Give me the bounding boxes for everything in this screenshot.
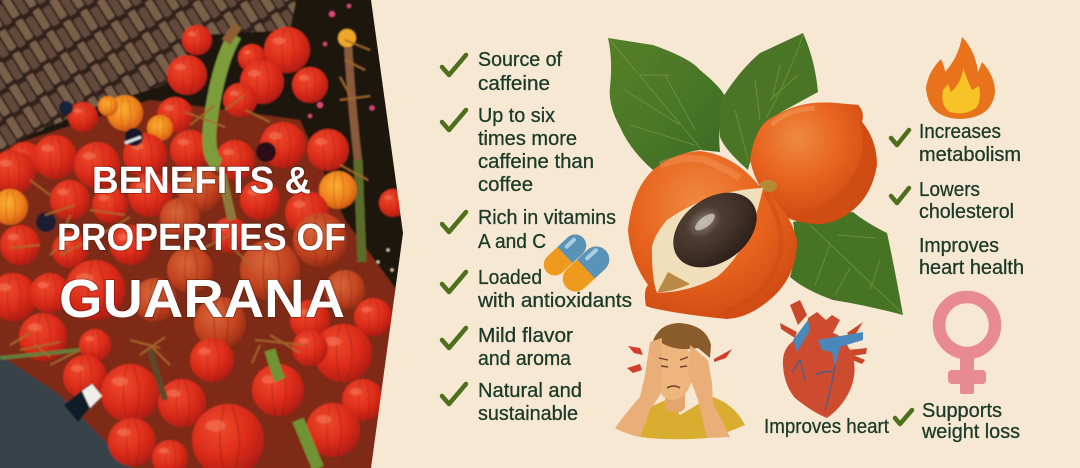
title line: benefits: BENEFITS & xyxy=(92,160,311,202)
hair xyxy=(652,323,711,358)
icon: anatomical heart xyxy=(780,300,867,418)
icon: female symbol xyxy=(939,297,995,394)
item: natural xyxy=(442,380,582,425)
item: natural: Natural and xyxy=(478,380,582,402)
item: six times more caffeine: caffeine than xyxy=(478,151,594,173)
seed xyxy=(659,177,771,283)
caption: improves heart: Improves heart xyxy=(764,416,889,438)
leaf: lower right xyxy=(790,212,903,315)
item: vitamins: A and C xyxy=(478,231,546,253)
item: metabolism xyxy=(891,121,1021,166)
item: natural: sustainable xyxy=(478,403,578,425)
item: six times more caffeine: coffee xyxy=(478,174,533,196)
item: metabolism: Increases xyxy=(919,121,1001,143)
item: weight loss: Supports xyxy=(922,400,1002,422)
berries back xyxy=(0,25,407,468)
item: vitamins xyxy=(442,207,616,253)
item: mild flavor: Mild flavor xyxy=(478,325,573,347)
item: mild flavor xyxy=(442,325,573,370)
item: metabolism: metabolism xyxy=(919,144,1021,166)
item: source of caffeine xyxy=(442,49,562,95)
fruit stem joint xyxy=(759,180,777,192)
icon: man with headache xyxy=(615,323,745,439)
item: cholesterol: cholesterol xyxy=(919,201,1014,223)
item: mild flavor: and aroma xyxy=(478,348,572,370)
stem right xyxy=(348,45,358,160)
item: heart health: heart health xyxy=(919,257,1024,279)
title xyxy=(57,160,346,329)
item: heart health xyxy=(919,235,1024,279)
stems and flower twigs xyxy=(0,25,370,468)
item: antioxidants xyxy=(442,267,632,312)
pith xyxy=(652,188,763,293)
guarana leaves xyxy=(608,33,903,315)
item: antioxidants: with antioxidants xyxy=(477,290,632,312)
item: vitamins: Rich in vitamins xyxy=(478,207,616,229)
item: six times more caffeine: Up to six xyxy=(478,105,555,127)
item: weight loss: weight loss xyxy=(921,421,1020,443)
item: source of caffeine: caffeine xyxy=(478,73,550,95)
icon: vitamin pills xyxy=(539,230,615,297)
benefits list left xyxy=(442,49,632,425)
leaf: upper right xyxy=(719,33,818,170)
photo panel: guarana berries xyxy=(0,0,408,468)
title line: properties of: PROPERTIES OF xyxy=(57,217,346,259)
guarana fruit: open with seed xyxy=(628,151,797,319)
item: six times more caffeine xyxy=(442,105,594,196)
item: source of caffeine: Source of xyxy=(478,49,562,71)
neck and face xyxy=(665,388,685,412)
item: six times more caffeine: times more xyxy=(478,128,577,150)
item: cholesterol xyxy=(891,179,1014,223)
closed eyes and mouth xyxy=(659,357,688,388)
icon: flame xyxy=(926,37,995,119)
item: antioxidants: Loaded xyxy=(478,267,542,289)
leaf: upper left xyxy=(608,38,725,170)
basket rim bottom xyxy=(0,352,135,468)
item: cholesterol: Lowers xyxy=(919,179,980,201)
arms xyxy=(615,338,662,437)
shirt xyxy=(640,397,745,439)
benefits list right xyxy=(891,121,1024,279)
item: weight loss xyxy=(895,400,1020,443)
dark seeds xyxy=(36,101,276,422)
guarana fruit: closed xyxy=(750,103,877,224)
pain marks xyxy=(627,346,732,373)
title line: guarana: GUARANA xyxy=(59,269,345,329)
item: heart health: Improves xyxy=(919,235,999,257)
